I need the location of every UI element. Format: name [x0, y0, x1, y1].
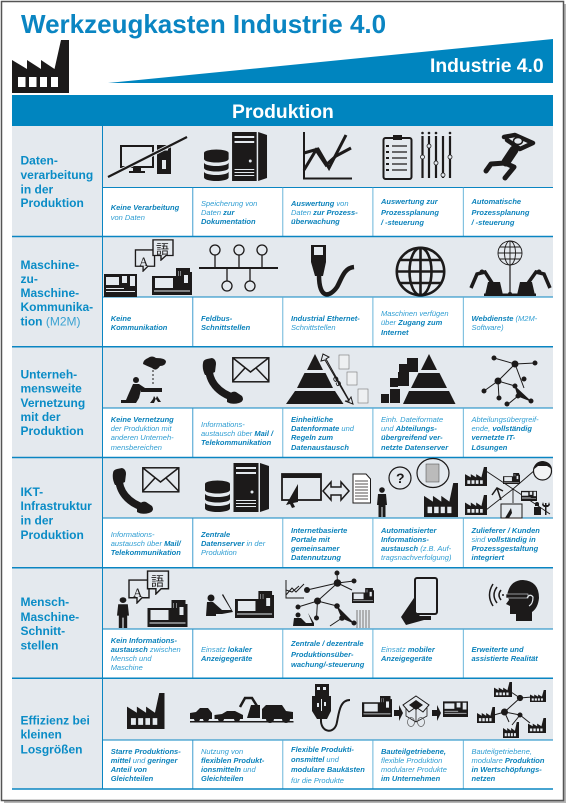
row heading: Schnitt-	[20, 624, 65, 638]
row heading: in der	[20, 514, 54, 528]
row heading: Produktion	[20, 196, 84, 210]
cell text: ionsmitteln und	[201, 765, 256, 774]
cell text: netzte Datenserver	[381, 443, 449, 452]
icon: factory	[127, 693, 164, 729]
cell text: gemeinsamer	[290, 544, 340, 553]
cell text: modulare Produktion	[472, 756, 544, 765]
table grid lines	[12, 126, 553, 789]
cell text: Keine Vernetzung	[111, 415, 174, 424]
cell text: Informations-	[201, 420, 245, 429]
row heading: Maschine-	[20, 258, 79, 272]
cell text: Datennutzung	[291, 553, 341, 562]
cell text: modulare Baukästen	[291, 765, 365, 774]
row heading: zu-	[20, 272, 38, 286]
cell text: Maschinen verfügen	[381, 309, 449, 318]
wedge banner: Industrie 4.0	[108, 39, 553, 83]
cell text: netzen	[472, 774, 496, 783]
icon: person, factory, speech bubbles	[377, 458, 458, 517]
icon: pyramid and data servers	[381, 354, 456, 404]
icon: cars on assembly line	[190, 698, 294, 723]
cell text: Produktion	[201, 548, 237, 557]
icon: suppliers and customers network	[465, 461, 552, 518]
row heading: IKT-	[20, 485, 43, 499]
cell text: tragsnachverfolgung)	[381, 553, 452, 562]
cell text: austausch zwischen	[111, 645, 181, 654]
cell text: Anteil von	[110, 765, 147, 774]
cell text: Feldbus-	[201, 314, 233, 323]
cell text: / -steuerung	[380, 218, 424, 227]
cell text: Automatisierter	[380, 526, 438, 535]
grey row backgrounds	[12, 126, 553, 789]
cell text: Speicherung von	[201, 199, 257, 208]
cell text: flexible Produktion	[381, 756, 442, 765]
cell text: austausch über Mail /	[201, 429, 273, 438]
cell text: Flexible Produkti-	[291, 745, 354, 754]
icon: database and server	[204, 132, 267, 181]
icon: phone and mail	[113, 468, 179, 514]
title: Werkzeugkasten Industrie 4.0	[21, 9, 386, 39]
cell text: Prozessgestaltung	[472, 544, 539, 553]
cell text: Keine	[111, 314, 131, 323]
row heading: Losgrößen	[20, 742, 82, 756]
cell text: der Produktion mit	[111, 424, 172, 433]
icon: fieldbus	[199, 245, 278, 291]
icon: globe	[397, 248, 444, 295]
row heading: verarbeitung	[20, 168, 93, 182]
row heading: Daten-	[20, 154, 58, 168]
cell text: Prozessplanung	[472, 208, 530, 217]
cell text: sind vollständig in	[472, 535, 536, 544]
row heading: Maschine-	[20, 286, 79, 300]
icon: web portal and document	[282, 474, 370, 508]
row 6: Effizienz bei kleinen Losgrößen	[20, 682, 546, 785]
icon: USB plug and cable	[312, 684, 350, 731]
row heading: mit der	[20, 410, 61, 424]
cell text: Bauteilgetriebene,	[472, 747, 532, 756]
cell text: Lösungen	[472, 443, 508, 452]
icon: person, machine, language bubbles: A	[133, 585, 143, 600]
icon: machines with language bubbles	[104, 240, 192, 297]
row heading: Infrastruktur	[20, 499, 92, 513]
cell text: austausch (z.B. Auf-	[381, 544, 451, 553]
cell text: Schnittstellen	[201, 323, 251, 332]
cell text: Datenserver in der	[201, 539, 265, 548]
cell text: vernetzte IT-	[472, 433, 516, 442]
icon: ethernet plug	[311, 245, 354, 294]
cell text: überwachung	[291, 217, 340, 226]
row 5: Mensch-Maschine-Schnittstellen	[20, 571, 539, 672]
cell text: Bauteilgetriebene,	[381, 747, 446, 756]
cell text: Zentrale / dezentrale	[290, 639, 364, 648]
row 1: Datenverarbeitung in der Produktion	[20, 132, 533, 227]
cell text: Schnittstellen	[291, 323, 336, 332]
icon: line chart	[304, 132, 352, 178]
cell text: Erweiterte und	[472, 645, 524, 654]
cell text: mensbereichen	[111, 443, 162, 452]
cell text: Einh. Dateiformate	[381, 415, 443, 424]
icon: factory logo	[12, 40, 69, 93]
row heading: Produktion	[20, 528, 84, 542]
cell text: übergreifend ver-	[381, 433, 443, 442]
header band: Produktion	[12, 95, 553, 126]
cell text: Informations-	[111, 530, 155, 539]
icon: person, factory, speech bubbles: ?	[396, 470, 405, 486]
row 4: IKT-Infrastruktur	[20, 458, 552, 562]
cell text: Portale mit	[291, 535, 330, 544]
cell text: Einheitliche	[291, 415, 333, 424]
row heading: Vernetzung	[20, 396, 85, 410]
icon: person, machine, language bubbles: 語	[151, 574, 164, 589]
cell text: Mensch und	[111, 654, 152, 663]
cell text: Datenformate und	[291, 424, 354, 433]
cell text: Auswertung zur	[380, 197, 439, 206]
icon: head with smart glasses	[490, 580, 539, 621]
cell text: Auswertung von	[291, 199, 349, 208]
cell text: Gleichteilen	[201, 774, 244, 783]
cell text: Industrial Ethernet-	[291, 314, 360, 323]
row heading: tion (M2M)	[20, 314, 80, 328]
icon: production network with chart, machine, operator	[286, 571, 374, 628]
row heading: Maschine-	[20, 610, 79, 624]
cell text: integriert	[472, 553, 505, 562]
row heading: Kommunika-	[20, 300, 93, 314]
cell text: Daten zur	[201, 208, 234, 217]
row heading: Effizienz bei	[20, 714, 90, 728]
wedge banner: Industrie 4.0: Industrie 4.0	[430, 56, 544, 77]
cell text: Informations-	[381, 535, 429, 544]
cell text: Starre Produktions-	[111, 747, 181, 756]
cell text: Zulieferer / Kunden	[470, 526, 540, 535]
cell text: Anzeigegeräte	[200, 654, 252, 663]
row heading: Mensch-	[20, 595, 69, 609]
cell text: Dokumentation	[201, 217, 256, 226]
cell text: Webdienste (M2M-	[472, 314, 537, 323]
cell text: für die Produkte	[291, 776, 344, 785]
icon: machines with language bubbles: 語	[156, 242, 169, 257]
row heading: Unterneh-	[20, 368, 77, 382]
icon: machines with language bubbles: A	[139, 254, 149, 269]
icon: modular product chain	[362, 696, 468, 726]
cell text: flexiblen Produkt-	[201, 756, 265, 765]
icon: person, machine, language bubbles	[117, 571, 188, 628]
cell text: Einsatz mobiler	[381, 645, 435, 654]
cell text: Regeln zum	[291, 433, 333, 442]
cell text: Abteilungsübergreif-	[470, 415, 539, 424]
icon: crossed-out computer	[108, 137, 187, 177]
cell text: in Wertschöpfungs-	[472, 765, 542, 774]
cell text: anderen Unterneh-	[111, 433, 174, 442]
cell text: mittel und geringer	[111, 756, 177, 765]
cell text: Maschine	[111, 663, 143, 672]
icon: operator with laptop at machine	[206, 591, 274, 618]
cell text: modularer Produkte	[381, 765, 447, 774]
cell text: Prozessplanung	[381, 208, 439, 217]
cell text: über Zugang zum	[381, 318, 442, 327]
row heading: kleinen	[20, 728, 62, 742]
cell text: Produktionsüber-	[291, 650, 354, 659]
cell text: und Abteilungs-	[381, 424, 437, 433]
cell text: von Daten	[111, 213, 145, 222]
row 2: Maschine-zu-Maschine-Kommunikation	[20, 240, 550, 337]
cell text: wachung/-steuerung	[291, 660, 365, 669]
cell text: / -steuerung	[470, 218, 515, 227]
cell text: im Unternehmen	[381, 774, 441, 783]
row 3: Unternehmensweite Vernetzung	[20, 354, 539, 452]
row heading: mensweite	[20, 382, 82, 396]
cell text: Internet	[381, 328, 409, 337]
cell text: Einsatz lokaler	[201, 645, 252, 654]
icon: network	[482, 356, 537, 406]
cell text: Telekommunikation	[111, 548, 181, 557]
cell text: Datenaustausch	[291, 443, 349, 452]
icon: person at smoke signal fire	[121, 356, 166, 403]
cell text: Gleichteilen	[111, 774, 154, 783]
cell text: Keine Verarbeitung	[111, 203, 180, 212]
header band: Produktion: Produktion	[232, 102, 334, 123]
row heading: Produktion	[20, 424, 84, 438]
icon: data format pyramid with arrow: GS	[331, 376, 342, 388]
cell text: Kommunikation	[111, 323, 168, 332]
row heading: stellen	[20, 638, 59, 652]
cell text: Daten zur Prozess-	[291, 208, 358, 217]
cell text: Telekommunikation	[201, 438, 272, 447]
cell text: Anzeigegeräte	[380, 654, 432, 663]
icon: clipboard and sliders	[384, 132, 452, 179]
cell text: Software)	[472, 323, 504, 332]
cell text: ende, vollständig	[472, 424, 532, 433]
cell text: assistierte Realität	[472, 654, 538, 663]
icon: hand holding tablet	[401, 578, 437, 625]
icon: factory network	[477, 682, 546, 738]
cell text: Automatische	[470, 197, 521, 206]
cell text: Zentrale	[200, 530, 230, 539]
row heading: in der	[20, 182, 54, 196]
icon: database and server	[205, 463, 269, 512]
icon: robot arms with globe	[471, 241, 550, 296]
cell text: Nutzung von	[201, 747, 243, 756]
cell text: onsmittel und	[291, 755, 339, 764]
icon: phone and mail	[203, 358, 269, 404]
cell text: austausch über Mail/	[111, 539, 181, 548]
icon: data format pyramid with arrow	[286, 354, 368, 404]
cell text: Kein Informations-	[111, 636, 177, 645]
cell text: Internetbasierte	[291, 526, 347, 535]
icon: relaxing person	[486, 135, 533, 178]
